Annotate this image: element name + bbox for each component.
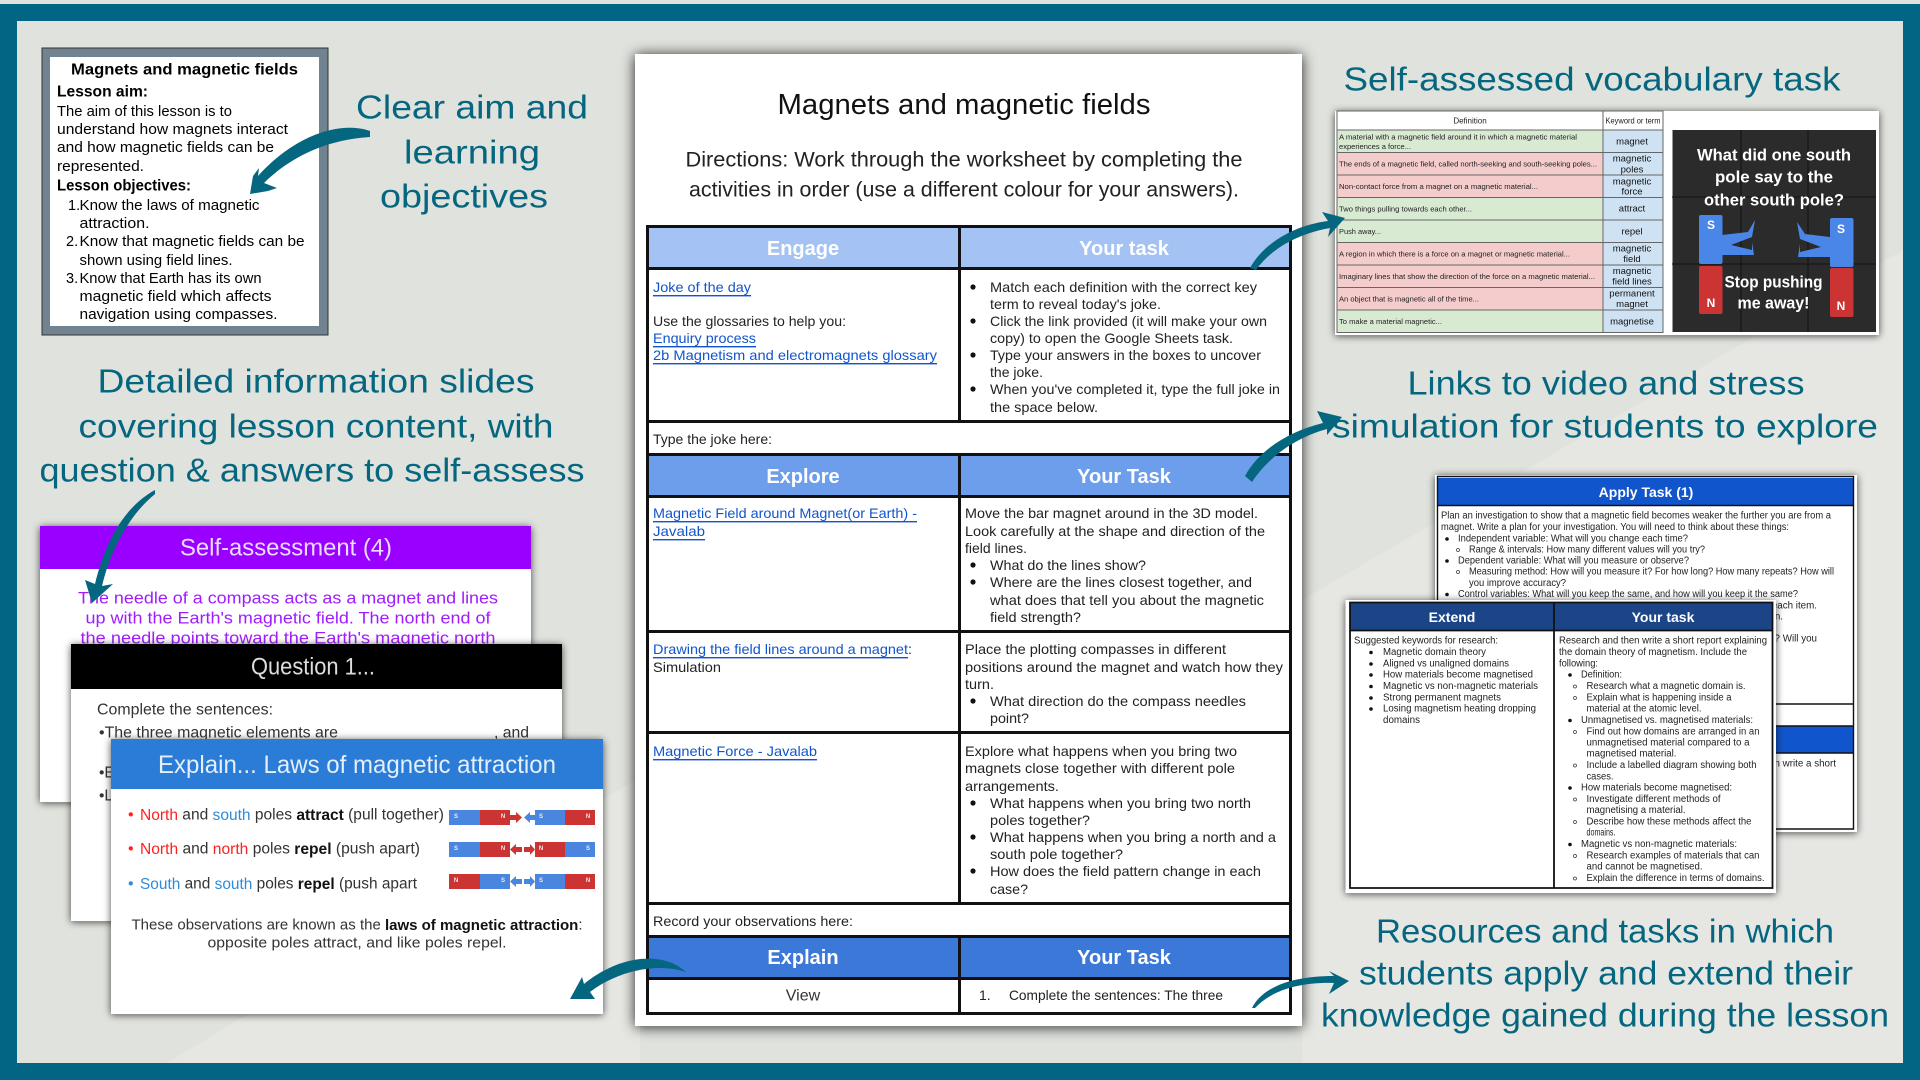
table header: engage: Your task — [1079, 238, 1170, 260]
engage row: links: Joke of the day — [653, 279, 751, 295]
lesson aim: represented. — [57, 159, 144, 175]
apply body text: magnet. Write a plan for your investigation. You will need to think about these things: — [1441, 522, 1789, 533]
worksheet directions: activities in order (use a different colour for your answers). — [689, 178, 1239, 202]
explore row 3: tasks: magnets close together with different pole — [965, 760, 1235, 776]
magnet diagram: attract: S — [539, 814, 543, 820]
question text: , — [415, 728, 419, 746]
explore row 2: tasks — [965, 641, 1283, 726]
arrow: to explain slide — [570, 959, 686, 999]
extend tasks: cases. — [1586, 772, 1614, 782]
extend keywords — [1354, 636, 1538, 726]
heading: self-assessed vocabulary task: Self-assessed vocabulary task — [1344, 60, 1841, 98]
explain row: 1. — [979, 987, 991, 1003]
vocabulary definitions: A material with a magnetic field around it in which a magnetic material — [1339, 132, 1577, 142]
slide body text: up with the Earth's magnetic field. The north end of — [86, 608, 491, 628]
vocabulary keywords: permanent — [1609, 288, 1655, 300]
heading: resources and tasks: students apply and extend their — [1359, 954, 1853, 992]
joke question: other south pole? — [1704, 190, 1844, 210]
vocabulary keywords: field — [1623, 254, 1641, 265]
explore row 2: simulation link — [653, 641, 912, 675]
lesson aim: understand how magnets interact — [57, 122, 288, 138]
vocabulary definitions: To make a material magnetic... — [1339, 317, 1442, 326]
extend tasks: Explain the difference in terms of domains. — [1586, 873, 1764, 884]
explain row — [786, 987, 1223, 1004]
lesson objectives: shown using field lines. — [80, 253, 232, 269]
table header: explain: Your Task — [1077, 947, 1172, 969]
explore row 1: tasks: what does that tell you about the magnetic — [989, 592, 1264, 608]
extend headers — [1429, 609, 1695, 625]
apply body text: each item. — [1772, 600, 1817, 612]
vocabulary keywords: magnetise — [1610, 316, 1654, 328]
explore row 1: tasks — [965, 505, 1265, 625]
engage row: tasks: term to reveal today's joke. — [990, 296, 1161, 312]
explore row 1: javalab link: Magnetic Field around Magnet(or Earth) - — [653, 505, 917, 521]
apply body text: Plan an investigation to show that a magnetic field becomes weaker the further you are from a — [1441, 510, 1832, 522]
apply body text: Measuring method: How will you measure it? For how long? How many repeats? How will — [1469, 566, 1834, 578]
left magnet character: N — [1707, 296, 1715, 310]
magnet diagram: attract: N — [501, 814, 505, 820]
panel: extend slide — [1346, 600, 1776, 893]
laws summary text: opposite poles attract, and like poles repel. — [208, 934, 506, 952]
worksheet directions — [686, 148, 1242, 202]
explore row 1: javalab link — [653, 505, 917, 539]
engage row: tasks: the joke. — [990, 364, 1043, 380]
explore row 1: tasks: Where are the lines closest together, and — [990, 574, 1252, 590]
vocabulary keywords: magnetic — [1613, 176, 1652, 188]
extend tasks: How materials become magnetised: — [1581, 782, 1732, 794]
engage row: links — [653, 279, 937, 363]
extend tasks: unmagnetised material compared to a — [1586, 738, 1750, 748]
slide title: Self-assessment (4) — [180, 534, 392, 562]
question text: •The three magnetic elements are — [99, 724, 338, 742]
explore row 1: tasks: What do the lines show? — [990, 557, 1146, 573]
law: south and south repel: • — [128, 876, 134, 892]
vocabulary header: Keyword or term — [1606, 116, 1661, 126]
heading: links to video and stress simulation: simulation for students to explore — [1332, 408, 1878, 444]
lesson objectives: 3. — [66, 271, 78, 287]
question text: , and — [494, 724, 529, 742]
lesson objectives: Know the laws of magnetic — [80, 198, 260, 214]
vocabulary keywords: poles — [1621, 164, 1644, 176]
joke question: pole say to the — [1715, 168, 1833, 186]
apply body text: you improve accuracy? — [1469, 578, 1567, 589]
worksheet table — [646, 225, 1292, 1015]
table header: explore — [647, 454, 1291, 496]
extend tasks: material at the atomic level. — [1586, 704, 1702, 714]
vocabulary definitions — [1339, 132, 1597, 326]
vocabulary keywords — [1609, 136, 1655, 328]
lesson objectives — [57, 178, 304, 323]
explore row 2: tasks: Place the plotting compasses in different — [965, 641, 1226, 657]
explore row 2: tasks: turn. — [965, 676, 994, 692]
explore row 1: javalab link: Javalab — [653, 523, 705, 539]
question text: •L — [99, 788, 113, 804]
lesson aim — [57, 84, 288, 175]
extend tasks: Magnetic vs non-magnetic materials: — [1581, 839, 1737, 850]
explore row 3: tasks: case? — [990, 881, 1028, 897]
heading: resources and tasks: Resources and tasks in which — [1376, 912, 1834, 950]
panel: lesson aim card — [42, 48, 328, 335]
lesson objectives: Know that Earth has its own — [80, 271, 262, 287]
record observations row: Record your observations here: — [653, 913, 853, 929]
extend tasks — [1559, 636, 1767, 884]
vocabulary header — [1453, 116, 1661, 126]
explain row: View — [786, 988, 821, 1004]
extend tasks: magnetising a material. — [1586, 805, 1686, 816]
extend tasks: Research examples of materials that can — [1586, 850, 1760, 862]
explain row: Complete the sentences: The three — [1009, 987, 1223, 1003]
vocabulary definitions: Imaginary lines that show the direction of the force on a magnetic material... — [1339, 272, 1595, 281]
engage row: tasks: Type your answers in the boxes to uncover — [990, 347, 1261, 363]
heading: clear aim and learning objectives — [356, 88, 588, 214]
slide body text: The needle of a compass acts as a magnet and lines — [78, 588, 498, 608]
engage row: tasks — [970, 279, 1280, 415]
right magnet character — [1797, 218, 1854, 317]
question text: Complete the sentences: — [97, 702, 273, 718]
lesson objectives: 2. — [66, 234, 78, 250]
table header: explore: Your Task — [1077, 466, 1172, 488]
worksheet directions: Directions: Work through the worksheet by completing the — [686, 148, 1242, 172]
card title: Magnets and magnetic fields — [71, 62, 298, 78]
extend tasks: Include a labelled diagram showing both — [1586, 760, 1756, 771]
lesson objectives: Lesson objectives: — [57, 178, 191, 194]
extend tasks: Research and then write a short report explaining — [1559, 636, 1767, 646]
magnet diagram: south repel: S — [501, 878, 505, 884]
extend tasks: Explain what is happening inside a — [1586, 692, 1732, 704]
vocabulary keywords: magnetic — [1613, 266, 1652, 277]
explore row 3: tasks: poles together? — [990, 812, 1090, 828]
magnet diagram: south repel: N — [586, 878, 590, 884]
laws summary text — [132, 916, 582, 952]
explore row 2: simulation link: Simulation — [653, 659, 721, 675]
engage row: tasks: When you've completed it, type the full joke in — [990, 381, 1280, 397]
extend tasks: the domain theory of magnetism. Include the — [1559, 647, 1748, 658]
explore row 3: tasks: What happens when you bring two north — [990, 795, 1251, 811]
arrow: to self-assessment slide — [85, 490, 155, 603]
magnet diagram: south repel: S — [539, 878, 543, 884]
apply body text: Range & intervals: How many different values will you try? — [1469, 544, 1706, 556]
law: north and north repel: North and north poles repel (push apart) — [140, 840, 420, 858]
apply body text: Dependent variable: What will you measure or observe? — [1458, 556, 1690, 566]
panel: self-assessment slide — [40, 526, 531, 802]
joke answer: Stop pushing — [1724, 272, 1822, 292]
extend tasks: following: — [1559, 658, 1598, 670]
magnet diagram: north repel: N — [501, 846, 505, 852]
explore row 3: tasks: arrangements. — [965, 778, 1059, 794]
vocabulary keywords: magnetic — [1613, 244, 1652, 254]
joke question: What did one south — [1697, 146, 1851, 164]
explore row 1: tasks: Move the bar magnet around in the 3D model. — [965, 505, 1258, 521]
explore row 3: tasks: What happens when you bring a north and a — [990, 829, 1276, 845]
panel: vocabulary task and joke — [1335, 111, 1879, 335]
vocabulary table — [1337, 111, 1663, 332]
law: south and south repel: South and south poles repel (push apart — [140, 876, 418, 892]
joke chalkboard — [1672, 130, 1876, 332]
explore row 3: link: Magnetic Force - Javalab — [653, 743, 817, 759]
explore row 3: tasks: south pole together? — [990, 846, 1123, 862]
apply body text: Independent variable: What will you change each time? — [1458, 534, 1689, 544]
vocabulary definitions: Push away... — [1339, 227, 1381, 236]
vocabulary keywords: repel — [1621, 226, 1643, 238]
apply body text: e? Will you — [1769, 634, 1817, 644]
right magnet character: S — [1837, 222, 1845, 236]
heading: resources and tasks — [1321, 912, 1889, 1034]
heading: detailed information slides — [40, 362, 584, 488]
heading: resources and tasks: knowledge gained during the lesson — [1321, 996, 1889, 1034]
lesson aim: and how magnetic fields can be — [57, 140, 274, 156]
explore row 1: tasks: field strength? — [990, 609, 1081, 625]
extend headers: Your task — [1632, 609, 1695, 625]
explore row 2: tasks: point? — [990, 710, 1029, 726]
explore row 3: tasks — [965, 743, 1276, 897]
engage row: tasks: copy) to open the Google Sheets task. — [990, 330, 1233, 346]
heading: clear aim and learning objectives: Clear aim and — [356, 88, 588, 126]
explore row 1: tasks: Look carefully at the shape and direction of the — [965, 523, 1265, 539]
explore row 3: tasks: How does the field pattern change in each — [990, 863, 1261, 879]
lesson objectives: Know that magnetic fields can be — [80, 234, 304, 250]
vocabulary definitions: The ends of a magnetic field, called north-seeking and south-seeking poles... — [1339, 160, 1597, 168]
engage row: tasks: Match each definition with the correct key — [990, 279, 1257, 295]
table header: explore: Explore — [766, 466, 840, 488]
joke answer: me away! — [1738, 294, 1810, 312]
explore row 2: simulation link: : — [908, 641, 912, 657]
explore row 1: tasks: field lines. — [965, 540, 1027, 556]
slide body text — [78, 588, 498, 648]
vocabulary keywords: magnetic — [1613, 154, 1652, 164]
lesson aim: The aim of this lesson is to — [57, 104, 232, 120]
joke question — [1697, 146, 1851, 210]
heading: links to video and stress simulation: Links to video and stress — [1408, 364, 1804, 402]
arrow: to links heading — [1245, 411, 1342, 482]
magnet diagram: south repel — [449, 874, 595, 889]
left magnet character: S — [1707, 218, 1715, 232]
extend keywords: domains — [1383, 715, 1420, 726]
extend keywords: Magnetic domain theory — [1383, 647, 1486, 658]
engage row: links: Use the glossaries to help you: — [653, 313, 846, 329]
vocabulary header: Definition — [1453, 116, 1487, 126]
magnet diagram: attract: S — [454, 814, 458, 820]
explore row 2: tasks: What direction do the compass needles — [990, 693, 1246, 709]
table header: engage — [647, 227, 1291, 268]
apply title: Apply Task (1) — [1599, 484, 1693, 500]
joke answer — [1724, 272, 1822, 312]
extend headers: Extend — [1429, 609, 1475, 625]
law: north and south attract: North and south poles attract (pull together) — [140, 806, 444, 824]
arrow: to lesson aim card — [250, 128, 370, 194]
extend tasks: domains. — [1586, 828, 1616, 838]
slide body text: the needle points toward the Earth's magnetic north — [80, 628, 496, 648]
heading: clear aim and learning objectives: objectives — [380, 178, 548, 214]
extend tasks: Investigate different methods of — [1586, 794, 1721, 805]
magnet diagram: north repel: N — [539, 846, 543, 852]
explore row 2: tasks: positions around the magnet and watch how they — [965, 659, 1283, 675]
apply body text: Control variables: What will you keep the same, and how will you keep it the same? — [1458, 589, 1799, 600]
extend tasks: Describe how these methods affect the — [1586, 816, 1752, 828]
vocabulary definitions: Non-contact force from a magnet on a magnetic material... — [1339, 182, 1538, 191]
table header: explain: Explain — [767, 947, 839, 969]
apply body text: n. — [1775, 612, 1783, 622]
apply body text: en write a short — [1769, 758, 1836, 770]
table header: explain — [647, 936, 1291, 978]
magnet diagram: north repel: S — [586, 846, 590, 852]
extend tasks: Definition: — [1581, 670, 1622, 680]
lesson objectives: magnetic field which affects — [80, 289, 272, 305]
arrow: to resources heading — [1252, 971, 1349, 1008]
extend keywords: Magnetic vs non-magnetic materials — [1383, 681, 1538, 692]
extend keywords: Suggested keywords for research: — [1354, 636, 1498, 646]
extend tasks: magnetised material. — [1586, 748, 1676, 760]
vocabulary keywords: magnet — [1616, 299, 1648, 310]
extend keywords: Losing magnetism heating dropping — [1383, 704, 1536, 714]
question text — [97, 702, 529, 804]
heading: links to video and stress simulation — [1332, 364, 1878, 444]
panel: explain slide laws of magnetic attraction — [111, 739, 603, 1014]
extend keywords: Strong permanent magnets — [1383, 692, 1501, 704]
heading: detailed information slides: Detailed information slides — [98, 362, 534, 400]
vocabulary keywords: magnet — [1616, 136, 1648, 148]
extend tasks: Find out how domains are arranged in an — [1586, 726, 1760, 738]
lesson objectives: attraction. — [80, 216, 150, 232]
slide title: Explain... Laws of magnetic attraction — [158, 751, 556, 779]
extend tasks: Research what a magnetic domain is. — [1586, 681, 1746, 692]
engage row: tasks: Click the link provided (it will make your own — [990, 313, 1267, 329]
arrow: to vocabulary task — [1250, 212, 1345, 270]
magnet diagram: north repel: S — [454, 846, 458, 852]
law: north and south attract: • — [128, 806, 134, 824]
type the joke row: Type the joke here: — [653, 431, 772, 447]
apply body text — [1441, 510, 1836, 770]
explore row 3: tasks: Explore what happens when you bring two — [965, 743, 1237, 759]
magnet diagram: south repel: N — [454, 878, 458, 884]
magnet diagram: attract: N — [586, 814, 590, 820]
left magnet character — [1699, 215, 1755, 314]
vocabulary definitions: Two things pulling towards each other... — [1339, 204, 1472, 214]
vocabulary keywords: force — [1621, 186, 1643, 198]
lesson objectives: 1. — [68, 198, 80, 214]
heading: detailed information slides: question & answers to self-assess — [40, 452, 584, 488]
panel: apply task slide — [1435, 475, 1857, 832]
laws summary text: These observations are known as the laws of magnetic attraction: — [132, 916, 582, 934]
magnet diagram: north repel — [449, 842, 595, 857]
engage row: links: 2b Magnetism and electromagnets glossary — [653, 347, 937, 363]
explore row 2: simulation link: Drawing the field lines around a magnet — [653, 641, 908, 657]
engage row: tasks: the space below. — [990, 399, 1098, 415]
question text: •E — [99, 764, 115, 782]
right magnet character: N — [1837, 299, 1845, 313]
vocabulary definitions: An object that is magnetic all of the time... — [1339, 294, 1479, 304]
vocabulary keywords: field lines — [1612, 276, 1652, 288]
engage row: links: Enquiry process — [653, 330, 756, 346]
extend keywords: Aligned vs unaligned domains — [1383, 658, 1509, 670]
magnet diagram: attract — [449, 810, 595, 825]
lesson aim: Lesson aim: — [57, 84, 148, 100]
heading: clear aim and learning objectives: learning — [404, 134, 540, 170]
panel: worksheet — [635, 54, 1302, 1026]
extend tasks: and cannot be magnetised. — [1586, 862, 1702, 872]
extend keywords: How materials become magnetised — [1383, 670, 1533, 680]
vocabulary keywords: attract — [1619, 204, 1646, 214]
vocabulary definitions: experiences a force... — [1339, 142, 1411, 151]
table header: engage: Engage — [767, 238, 839, 260]
panel: question 1 slide — [71, 644, 562, 921]
extend tasks: Unmagnetised vs. magnetised materials: — [1581, 715, 1753, 726]
law: north and north repel: • — [128, 840, 134, 858]
slide title: Question 1... — [251, 654, 375, 680]
worksheet title: Magnets and magnetic fields — [778, 89, 1150, 121]
heading: detailed information slides: covering lesson content, with — [78, 408, 554, 444]
lesson objectives: navigation using compasses. — [80, 307, 278, 323]
vocabulary definitions: A region in which there is a force on a magnet or magnetic material... — [1339, 250, 1570, 258]
